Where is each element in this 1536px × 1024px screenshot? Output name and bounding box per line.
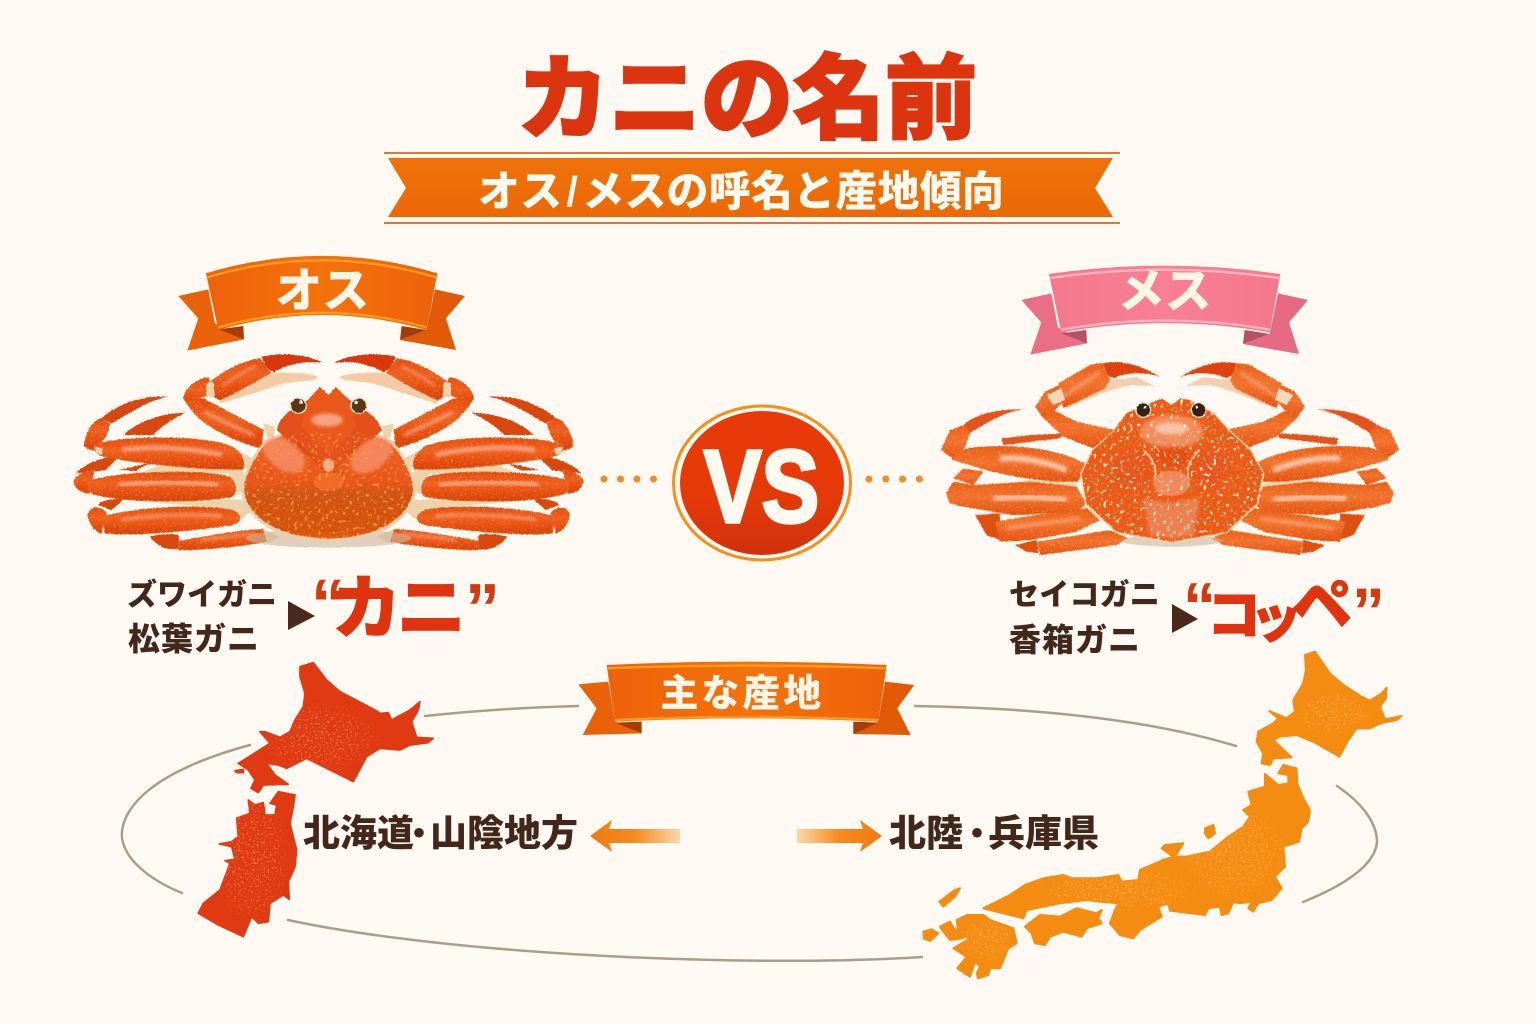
map: 日本全体 (923, 652, 1402, 978)
male nickname: “ (311, 565, 346, 643)
subtitle banner (384, 153, 1120, 223)
label: メス: メス (1118, 264, 1212, 317)
arrow: left (590, 820, 680, 852)
male nickname (311, 565, 500, 647)
label: 主な産地: 主な産地 (660, 674, 824, 716)
crab: male (74, 354, 583, 550)
arrow: right (797, 820, 882, 852)
label: 北海道・山陰地方: 山陰地方 (430, 813, 578, 854)
label: 北陸・兵庫県: 兵庫県 (988, 813, 1099, 854)
name: 香箱ガニ: 香箱ガニ (1009, 622, 1141, 658)
label: オス: オス (275, 264, 369, 317)
female nickname: コ (1207, 586, 1261, 646)
crab: female (941, 362, 1399, 555)
origin ellipse (122, 706, 1377, 961)
name: セイコガニ: セイコガニ (1009, 579, 1160, 612)
label: 北陸・兵庫県: ・ (960, 816, 994, 854)
dotted connector right (869, 476, 920, 482)
female nickname: ” (1352, 574, 1385, 648)
male nickname: ” (465, 569, 500, 647)
ribbon: 主な産地 (578, 662, 914, 735)
ribbon: メス (1021, 264, 1308, 355)
title: カニの名前 (517, 49, 977, 151)
VS text: VS (704, 430, 819, 545)
arrow: female names (1172, 604, 1198, 633)
female names (1009, 579, 1160, 658)
dotted connector left (604, 476, 654, 482)
male names (127, 578, 277, 657)
male nickname: カニ (332, 570, 462, 647)
label: 北海道・山陰地方: ・ (402, 816, 436, 854)
map: 北海道・山陰 (198, 663, 433, 937)
label: 北陸・兵庫県: 北陸 (889, 813, 963, 854)
name: ズワイガニ: ズワイガニ (127, 578, 277, 612)
subtitle text: オス/メスの呼名と産地傾向 (478, 168, 1004, 215)
female nickname: ペ (1292, 572, 1352, 639)
arrow: male names (288, 601, 315, 630)
VS badge (672, 404, 852, 562)
female nickname: ッ (1250, 591, 1302, 649)
female nickname: “ (1183, 569, 1216, 643)
label: 北海道・山陰地方: 北海道 (303, 813, 414, 854)
female nickname (1183, 569, 1385, 649)
ribbon: オス (178, 256, 465, 351)
name: 松葉ガニ: 松葉ガニ (128, 621, 260, 657)
